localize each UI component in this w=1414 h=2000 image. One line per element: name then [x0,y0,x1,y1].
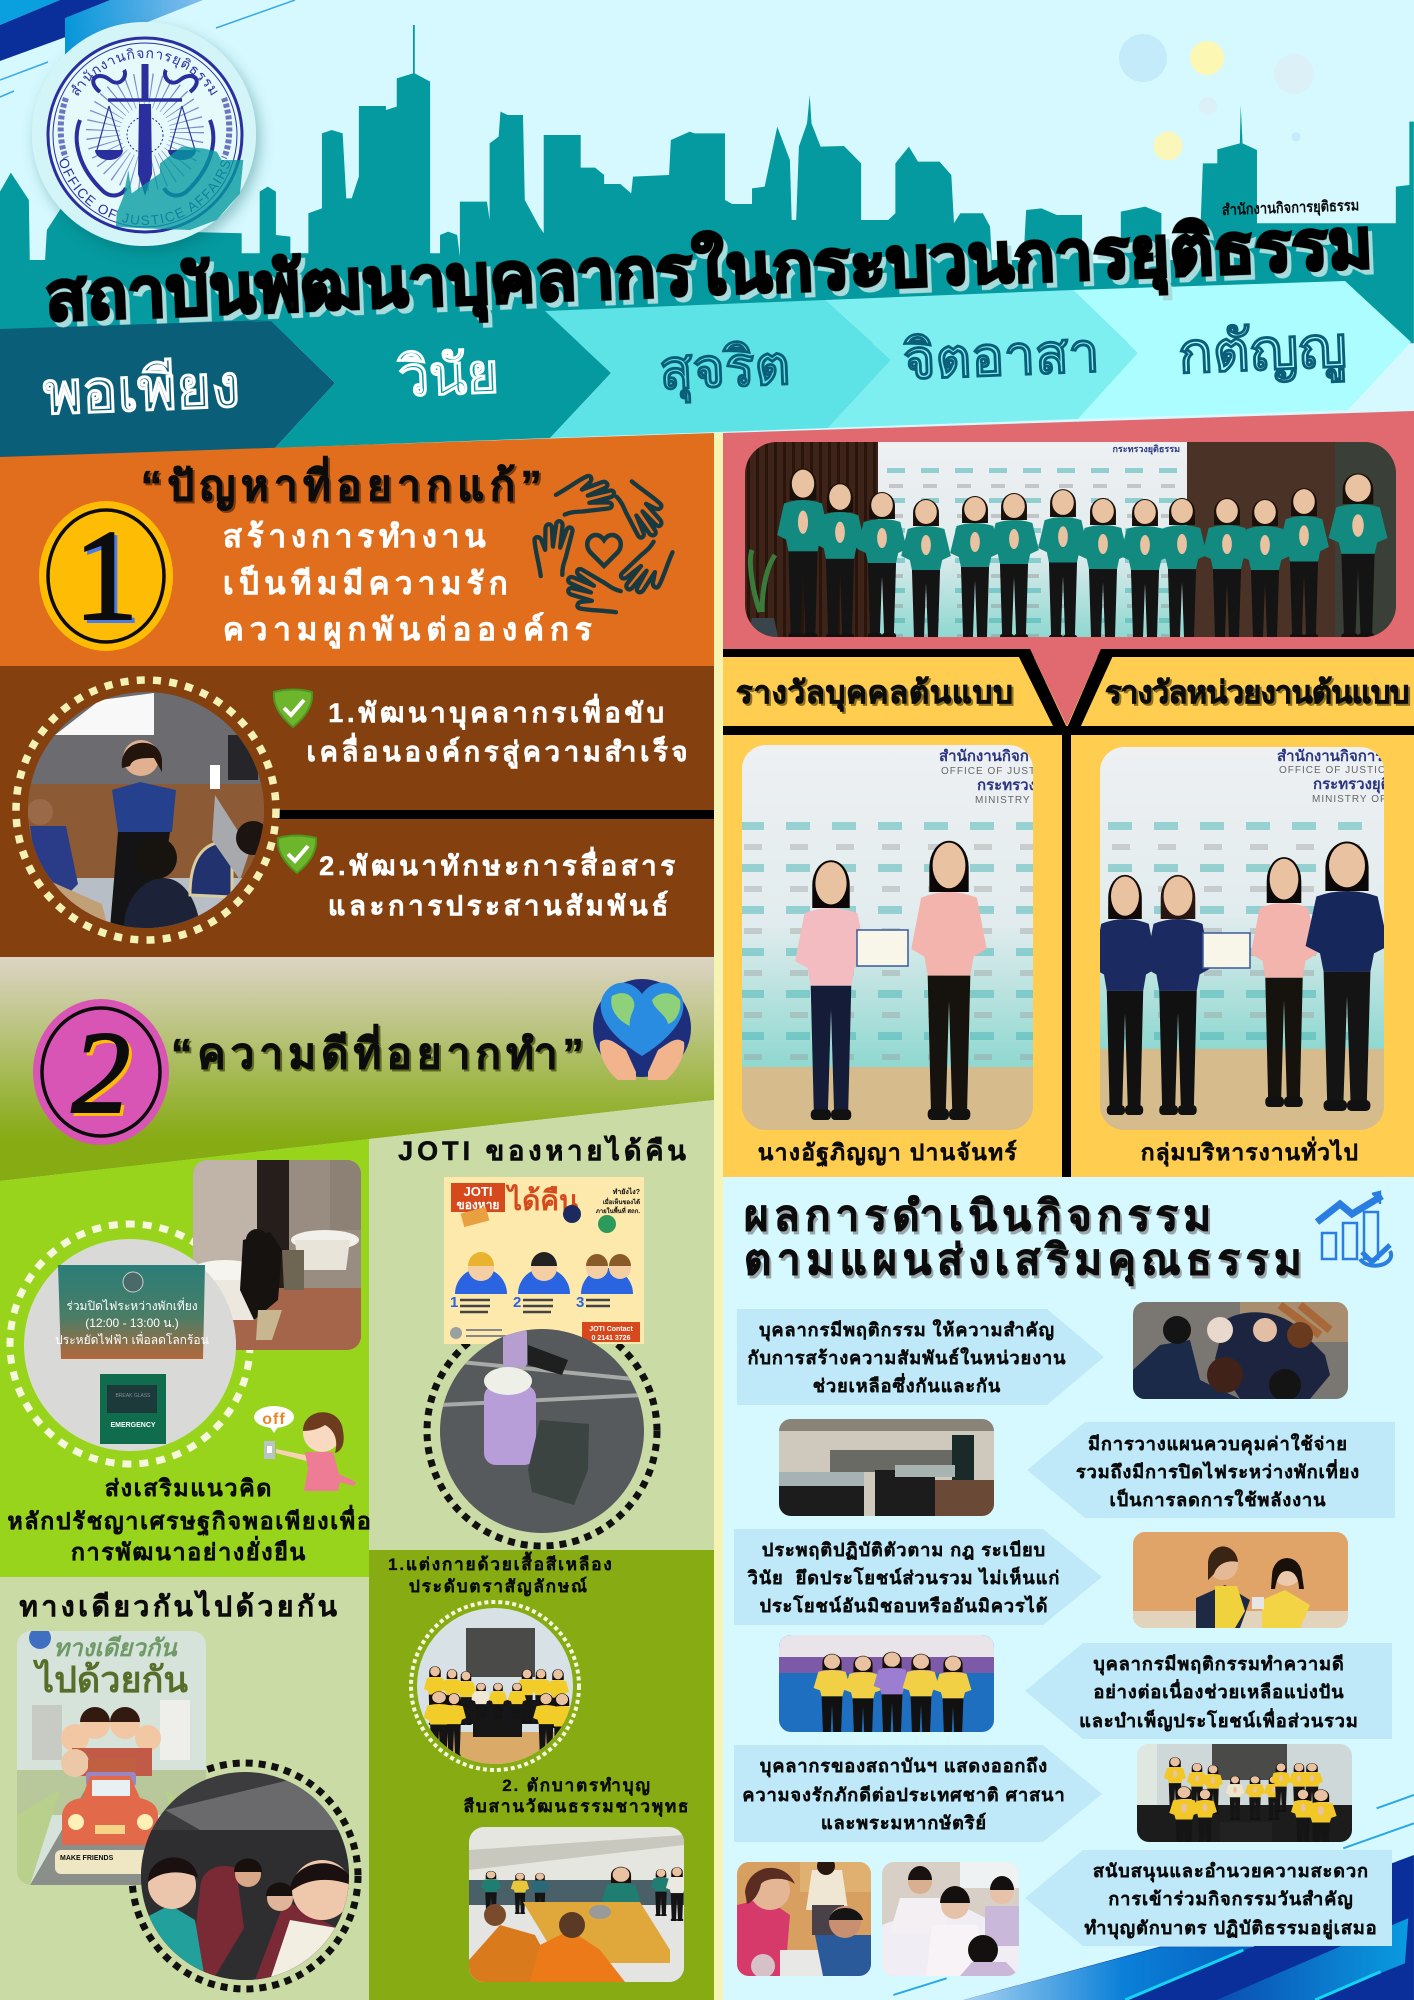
heading: individual award: รางวัลบุคคลต้นแบบ [736,675,1014,712]
photo: office [779,1419,994,1516]
illustration: off bubble and girl [254,1406,356,1491]
olive panel background [369,1550,714,2000]
text: alms giving: 2. ตักบาตรทำบุญ [502,1776,652,1796]
logo: Office of Justice Affairs seal: สำนักงานกิจการยุติธรรม [72,48,218,96]
icon: hands around heart [534,469,676,616]
panel: section 2 good deeds [0,957,714,2000]
heading: ผลการดำเนินกิจกรรม [744,1192,1216,1239]
chevron: จิตอาสา [825,290,1138,428]
column divider [1062,735,1071,1177]
photo: light switch sign: EMERGENCY [110,1422,156,1429]
chevron: วินัย [245,311,611,448]
dotted ring behind lost items photo [427,1316,657,1546]
number badge 1: 1 [76,507,142,651]
arrow 5: loyalty: บุคลากรของสถาบันฯ แสดงออกถึง [760,1756,1048,1778]
arrow 6: supporting religious activities: ทำบุญตักบาตร ปฏิบัติธรรมอยู่เสมอ [1084,1918,1378,1940]
photo: staff in yellow shirts in dotted circle [411,1602,579,1770]
text: yellow shirts [388,1551,614,1597]
text: teamwork [223,519,598,649]
text: develop communication skills: และการประสานสัมพันธ์ [328,890,672,921]
heading [744,1192,1307,1286]
black rule middle [723,726,1414,735]
arrow 6: supporting religious activities [1025,1850,1392,1946]
photo: unit award handover [1100,747,1384,1130]
photo: five staff at event banner [779,1635,994,1732]
photo: team activity [1133,1302,1348,1401]
arrow 1: relationships: บุคลากรมีพฤติกรรม ให้ความสำคัญ [759,1319,1055,1342]
arrow 4: doing good: บุคลากรมีพฤติกรรมทำความดี [1093,1654,1345,1676]
arrow 2: saving energy: มีการวางแผนควบคุมค่าใช้จ่าย [1088,1433,1348,1456]
value label: กตัญญู: กตัญญู [1177,315,1348,389]
JOTI poster: 3 [576,1294,584,1311]
main title: สถาบันพัฒนาบุคลากรในกระบวนการยุติธรรม [43,204,1374,339]
arrow 3: rules and integrity: ประโยชน์อันมิชอบหรืออันมิควรได้ [760,1595,1048,1616]
number badge 2: 2 [74,1010,134,1141]
value label: พอเพียง: พอเพียง [42,353,241,427]
heading: JOTI: JOTI ของหายได้คืน [398,1135,690,1166]
arrow 4: doing good: และบำเพ็ญประโยชน์เพื่อส่วนรวม [1079,1708,1359,1732]
dotted ring behind sign photo [10,1224,250,1464]
arrow 1: relationships: ช่วยเหลือซึ่งกันและกัน [813,1373,1001,1396]
photo: speaker in circle with dotted ring [16,680,276,940]
poster: go together [17,1627,206,1885]
caption: unit: กลุ่มบริหารงานทั่วไป [1141,1136,1359,1167]
heading: ตามแผนส่งเสริมคุณธรรม [744,1236,1307,1286]
JOTI poster: 1 [450,1294,458,1311]
arrow 2: saving energy [1027,1422,1395,1518]
number badge 1: 1 [74,504,138,648]
bright green panel [0,1139,369,1577]
arrow 5: loyalty: ความจงรักภักดีต่อประเทศชาติ ศาสนา [742,1785,1066,1805]
photo: individual award handover [742,745,1033,1130]
corner decoration: blue diagonal stripes [0,0,295,97]
panel: JOTI background [369,1100,714,1550]
heading: go together: ทางเดียวกันไปด้วยกัน [19,1590,341,1622]
panel: awards [723,411,1414,1177]
text: teamwork: เป็นทีมมีความรัก [223,564,513,601]
arrow 3: rules and integrity: วินัย ยึดประโยชน์ส่วนรวม ไม่เห็นแก่ [747,1566,1060,1588]
text: develop communication skills [319,846,679,921]
text: sufficiency philosophy: การพัฒนาอย่างยั่งยืน [71,1535,307,1565]
photo: individual award handover: OFFICE OF JUSTICE AFFAIRS [941,766,1108,777]
yellow heading band [723,657,1414,727]
arrow 5: loyalty: และพระมหากษัตริย์ [821,1812,987,1833]
poster: go together: MAKE FRIENDS [60,1855,114,1862]
arrow 3: rules and integrity [734,1529,1102,1625]
icon: green check shield 1 [274,690,312,727]
city skyline silhouette [0,25,1414,343]
decorative bubbles [1119,34,1314,160]
icon: earth in hands [593,979,691,1080]
text: yellow shirts: 1.แต่งกายด้วยเสื้อสีเหลือง [388,1551,614,1574]
photo: individual award handover: สำนักงานกิจการยุติธรรม [939,747,1099,766]
text: develop personnel [307,693,691,769]
text: sufficiency philosophy [7,1475,373,1565]
arrow 6: supporting religious activities: สนับสนุนและอำนวยความสะดวก [1093,1861,1369,1883]
gradient banner [0,957,714,1181]
JOTI poster: 0 2141 3726 [592,1335,631,1342]
text: yellow shirts: ประดับตราสัญลักษณ์ [409,1576,589,1597]
JOTI poster: ภายในพื้นที่ สถก. [596,1205,640,1215]
photo: two women with item [1133,1532,1348,1628]
photo: lost items [440,1329,644,1533]
arrow 3: rules and integrity: ประพฤติปฏิบัติตัวตาม กฎ ระเบียบ [762,1540,1046,1560]
photo: light switch sign [24,1239,236,1451]
poster: go together: ไปด้วยกัน [32,1658,188,1700]
heading: “ปัญหาที่อยากแก้” [141,456,547,511]
caption: person: นางอัฐภิญญา ปานจันทร์ [758,1139,1018,1167]
photo: team in teal shirts [745,442,1396,646]
text: develop personnel: เคลื่อนองค์กรสู่ความสำเร็จ [307,732,691,769]
pink team photo panel [723,411,1414,649]
photo: alms giving to monks [469,1827,688,1982]
photo: individual award handover: MINISTRY OF JUSTICE [975,795,1103,806]
text: develop personnel: 1.พัฒนาบุคลากรเพื่อขับ [328,693,668,730]
panel: header banner [0,0,1414,457]
number badge 2 [33,999,169,1145]
arrow 1: relationships [737,1309,1104,1405]
arrow 4: doing good: อย่างต่อเนื่องช่วยเหลือแบ่งปัน [1093,1679,1345,1702]
photo: light switch sign: ประหยัดไฟฟ้า เพื่อลดโลกร้อน [55,1331,209,1347]
value label: จิตอาสา: จิตอาสา [902,321,1101,391]
illustration: off bubble and girl: off [262,1411,286,1428]
photo: light switch sign: (12:00 - 13:00 น.) [85,1316,179,1330]
arrow 1: relationships: กับการสร้างความสัมพันธ์ในหน่วยงาน [748,1347,1066,1368]
photo: individual award handover: กระทรวงยุติธรรม [977,776,1090,795]
arrow 2: saving energy: เป็นการลดการใช้พลังงาน [1110,1488,1326,1510]
JOTI poster: JOTI [464,1184,492,1199]
small organisation label: สำนักงานกิจการยุติธรรม [1222,196,1360,219]
decorative blue corner bottom right [893,1795,1414,2000]
panel: results of moral activities [734,1192,1414,2000]
text: alms giving: สืบสานวัฒนธรรมชาวพุทธ [464,1796,690,1817]
text: alms giving [464,1776,690,1817]
icon: green check shield 2 [278,836,316,873]
photo: staff in white practising dharma [882,1862,1019,1976]
number badge 1 [39,501,173,651]
cream divider strip [714,433,723,2000]
logo: Office of Justice Affairs seal [28,20,268,254]
brown panel background [0,666,714,957]
icon: rising chart with check [1317,1192,1391,1266]
logo: Office of Justice Affairs seal: OFFICE OF JUSTICE AFFAIRS [60,158,230,226]
heading: unit award: รางวัลหน่วยงานต้นแบบ [1105,675,1409,710]
value label: วินัย: วินัย [396,342,500,408]
heading: “ความดีที่อยากทำ” [171,1024,589,1077]
JOTI poster: ของหาย [457,1198,499,1212]
black divider [278,810,714,819]
black rule top [723,649,1414,657]
orange banner background [0,433,714,666]
chevron: พอเพียง [0,320,335,460]
arrow 6: supporting religious activities: การเข้าร่วมกิจกรรมวันสำคัญ [1108,1889,1354,1910]
photo: light switch sign: BREAK GLASS [115,1393,151,1399]
dotted ring behind car photo [132,1763,358,1989]
JOTI poster: 2 [513,1294,521,1311]
panel: section 1 problem to solve [0,433,714,957]
number badge 2: 2 [72,1007,130,1138]
chevron: สุจริต [545,300,891,438]
photo: blessing elder [737,1857,871,1978]
text: sufficiency philosophy: ส่งเสริมแนวคิด [105,1475,273,1501]
arrow 4: doing good [1025,1643,1392,1739]
pink pointer triangle [1015,649,1116,728]
award panels background [723,735,1414,1177]
text: teamwork: สร้างการทำงาน [223,519,491,554]
JOTI poster: ได้คืน [505,1184,578,1216]
photo: restaurant lunchtime [181,1160,361,1350]
JOTI poster [444,1177,644,1344]
arrow 5: loyalty [734,1745,1102,1842]
text: develop communication skills: 2.พัฒนาทักษะการสื่อสาร [319,846,679,881]
poster: go together: ทางเดียวกัน [53,1635,178,1662]
value label: สุจริต: สุจริต [658,334,792,405]
panel: go together background [0,1577,369,2000]
photo: friends in car [141,1772,354,1980]
photo: light switch sign: ร่วมปิดไฟระหว่างพักเที่ยง [66,1297,198,1313]
chevron: กตัญญู [1073,281,1411,419]
JOTI poster: JOTI Contact [589,1326,633,1333]
JOTI poster: ทำยังไง? [613,1187,640,1196]
arrow 2: saving energy: รวมถึงมีการปิดไฟระหว่างพักเที่ยง [1076,1459,1360,1482]
text: sufficiency philosophy: หลักปรัชญาเศรษฐกิจพอเพียงเพื่อ [7,1504,373,1536]
text: teamwork: ความผูกพันต่อองค์กร [223,612,598,649]
photo: team in teal shirts: กระทรวงยุติธรรม [1112,444,1180,455]
photo: staff in yellow on sofas [1137,1744,1352,1842]
JOTI poster: เมื่อเห็นของได้ [603,1197,640,1206]
